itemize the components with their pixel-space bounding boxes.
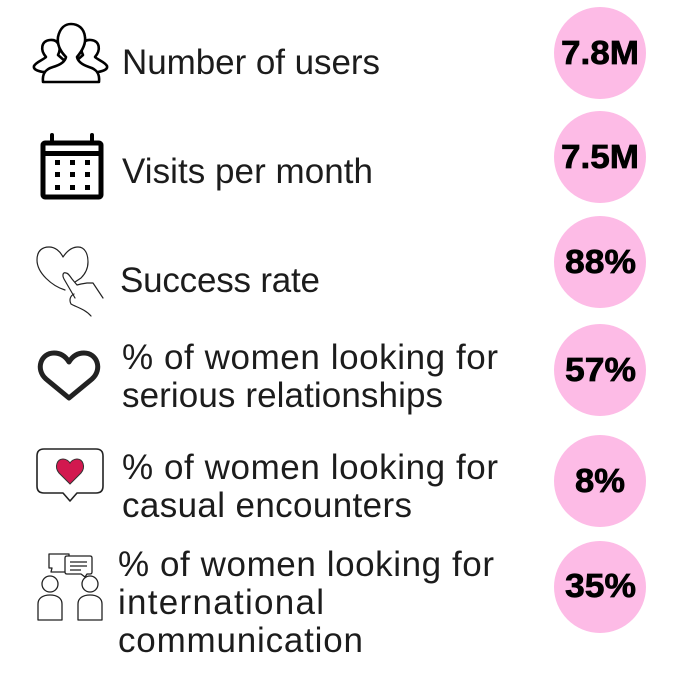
label: international communication: communication <box>118 621 363 660</box>
value circle: 8%: 8% <box>575 462 625 499</box>
label: success rate: Success rate <box>120 261 320 300</box>
label: number of users: Number of users <box>122 43 380 82</box>
label: serious relationships: % of women looking for <box>122 338 498 377</box>
row: international communication <box>38 541 646 660</box>
label: visits per month: Visits per month <box>122 152 373 191</box>
value circle: 88%: 88% <box>565 243 636 280</box>
value circle: 35%: 35% <box>565 567 636 604</box>
icon: heart outline <box>40 353 98 398</box>
value circle: 57%: 57% <box>565 351 636 388</box>
label: casual encounters: casual encounters <box>122 486 412 525</box>
row: casual encounters <box>37 435 646 527</box>
value circle: 7.8M: 7.8M <box>561 34 639 71</box>
value circle: 7.5M: 7.5M <box>561 138 639 175</box>
row: visits per month <box>42 111 646 203</box>
icon: calendar <box>42 133 102 197</box>
value circle: 88% <box>554 216 646 308</box>
value circle: 35% <box>554 541 646 633</box>
value circle: 7.8M <box>554 7 646 99</box>
value circle: 8% <box>554 435 646 527</box>
label: international communication: % of women looking for <box>118 545 494 584</box>
value circle: 7.5M <box>554 111 646 203</box>
row: number of users <box>34 7 646 99</box>
value circle: 57% <box>554 324 646 416</box>
icon: chat bubble with heart <box>37 449 103 501</box>
row: serious relationships <box>40 324 646 416</box>
label: international communication: international <box>118 583 324 622</box>
row: success rate <box>37 216 646 316</box>
icon: heart with hand <box>37 247 103 316</box>
label: casual encounters: % of women looking for <box>122 448 498 487</box>
icon: users <box>34 24 107 82</box>
label: serious relationships: serious relationships <box>122 376 443 415</box>
icon: two people talking <box>38 554 102 620</box>
